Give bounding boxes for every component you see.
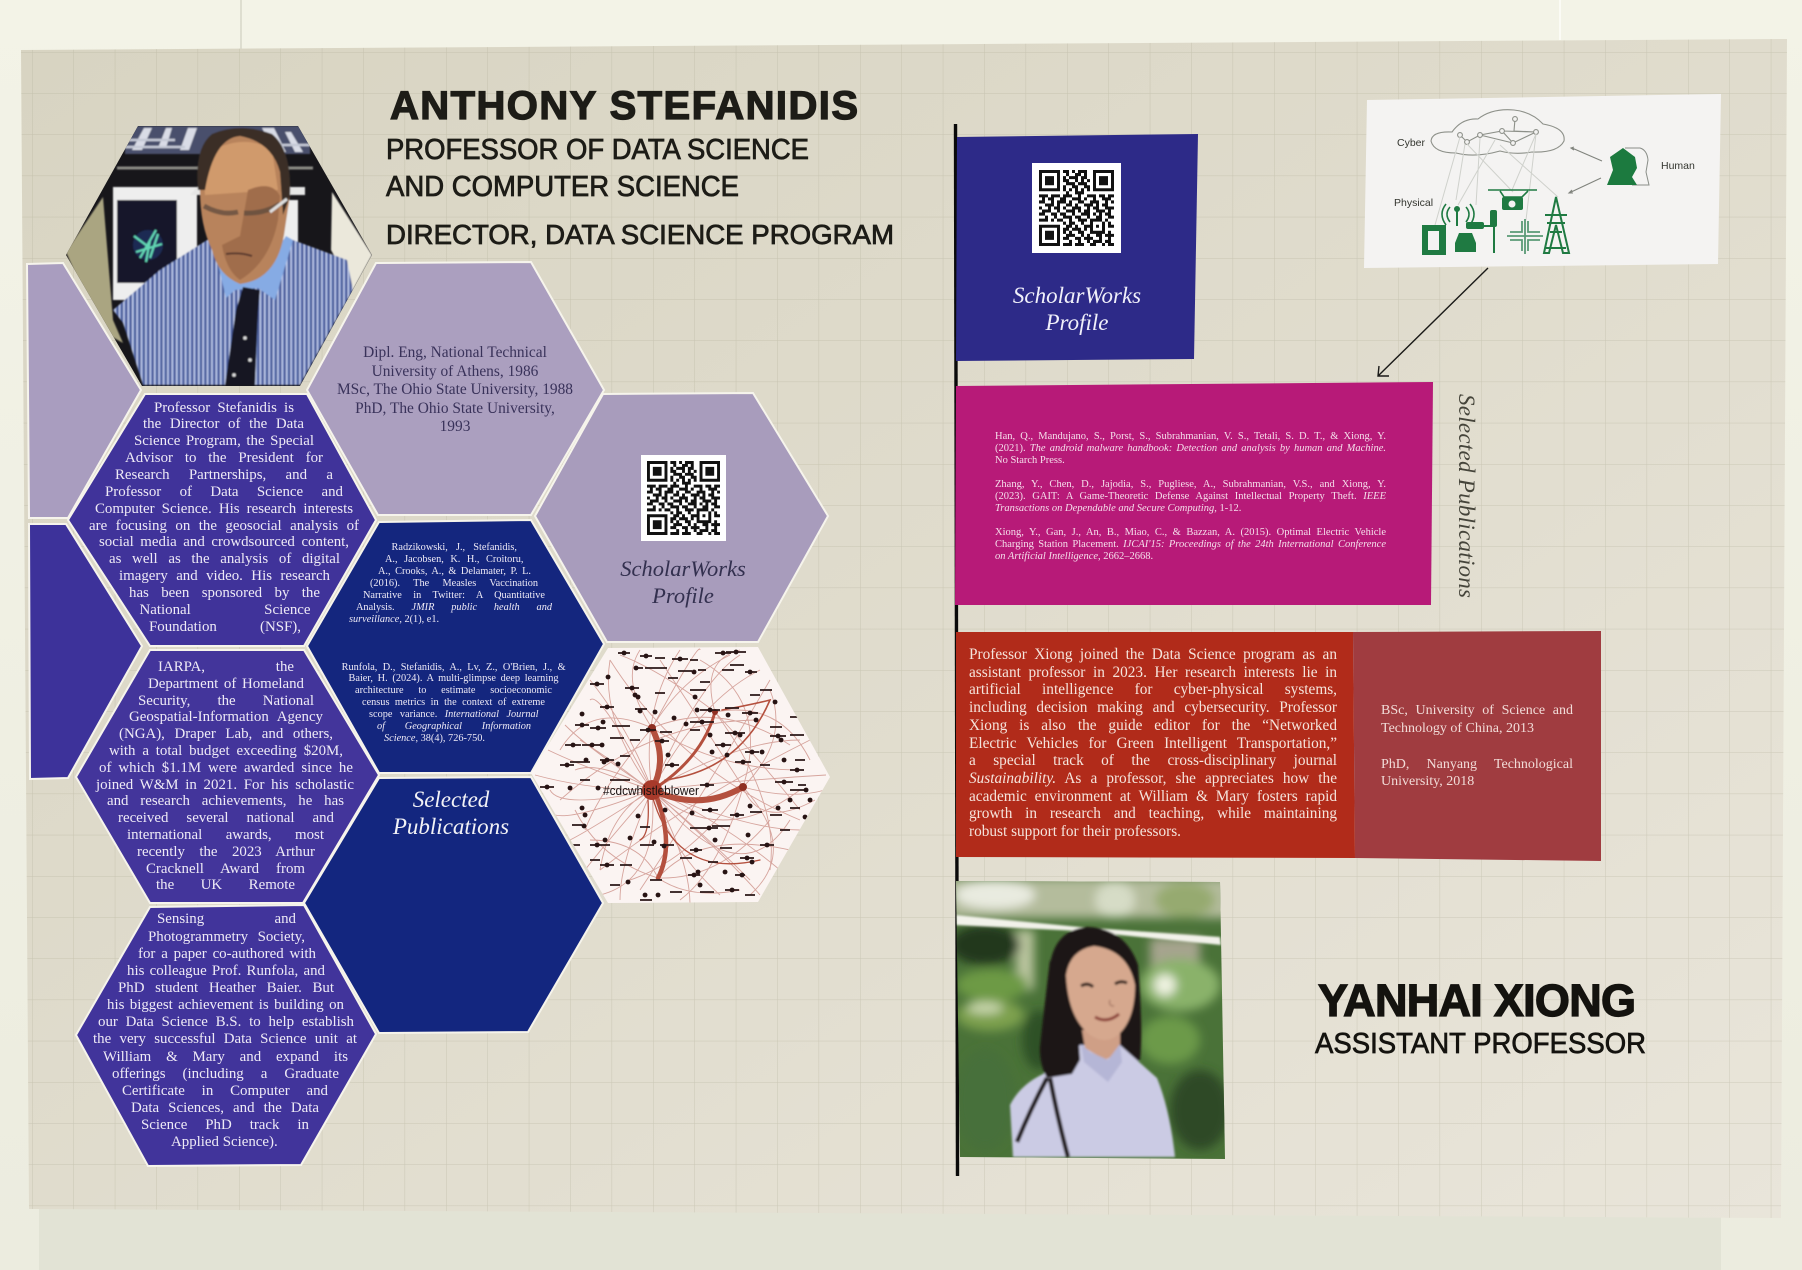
publication text: Runfola 2024: of Geographical Information — [377, 721, 531, 732]
publication text: Radzikowski 2016: Narrative in Twitter: A Quantitative — [363, 590, 545, 601]
publications text: Xiong: Han, Q., Mandujano, S., Porst, S., Subrahmanian, V. S., Tetali, S. D. T., & Xiong, Y. — [995, 431, 1386, 442]
bio text part 1: as well as the analysis of digital — [109, 551, 340, 567]
bio text part 2: joined W&M in 2021. For his scholastic — [96, 777, 354, 793]
bio text part 3: his biggest achievement is building on — [107, 997, 344, 1013]
publications text: Xiong: (2021). The android malware handbook: Detection and analysis by human and Machine. — [995, 443, 1386, 454]
biography red panel — [956, 632, 1355, 858]
partial blue hexagon at left edge — [29, 524, 142, 779]
biography text: Xiong: including decision making and cybersecurity. Professor — [969, 699, 1337, 716]
education rose panel — [1353, 631, 1601, 861]
caption: Selected Publications hexagon: Publications — [393, 814, 509, 839]
bio text part 2: with a total budget exceeding $20M, — [109, 743, 343, 759]
education text: Stefanidis: University of Athens, 1986 — [372, 363, 538, 380]
publications hexagon — [307, 520, 604, 773]
bio text part 3: Sensing and — [157, 911, 296, 927]
bio text part 2: Cracknell Award from — [146, 861, 305, 877]
heading: Yanhai Xiong name and title — [1315, 975, 1646, 1060]
biography text: Xiong: Professor Xiong joined the Data Science program as an — [969, 646, 1337, 663]
heading: Anthony Stefanidis name and titles: ANTHONY STEFANIDIS — [390, 84, 858, 128]
bio text part 1: the Director of the Data — [143, 416, 304, 432]
bio text part 3: Science PhD track in — [141, 1117, 309, 1133]
education text: Stefanidis: PhD, The Ohio State University, — [355, 400, 555, 417]
heading: Yanhai Xiong name and title: YANHAI XIONG — [1318, 975, 1636, 1026]
publication text: Radzikowski 2016 — [349, 542, 552, 625]
bio text part 3: Data Sciences, and the Data — [131, 1100, 319, 1116]
biography text: Xiong: Sustainability. As a professor, she appreciates how the — [969, 770, 1337, 787]
biography text: Xiong: robust support for their professors. — [969, 823, 1181, 840]
publication text: Radzikowski 2016: A., Jacobsen, K. H., Croitoru, — [385, 554, 524, 565]
education text: Stefanidis: MSc, The Ohio State University, 1988 — [337, 381, 573, 398]
publication text: Runfola 2024 — [342, 662, 566, 744]
caption: Selected Publications hexagon — [392, 787, 509, 839]
education text: Xiong: BSc, University of Science and — [1381, 703, 1573, 718]
biography text: Xiong — [969, 646, 1337, 840]
publication text: Radzikowski 2016: Radzikowski, J., Stefanidis, — [392, 542, 517, 553]
bio text part 3: PhD student Heather Baier. But — [118, 980, 334, 996]
biography text: Xiong: Xiong is also the guide editor for the “Networked — [969, 717, 1337, 734]
bio text part 1: National Science — [140, 602, 310, 618]
caption: ScholarWorks Profile in blue panel — [1013, 283, 1141, 335]
publication text: Runfola 2024: Science, 38(4), 726-750. — [384, 733, 485, 744]
ScholarWorks panel for Xiong — [956, 134, 1198, 361]
publication text: Radzikowski 2016: A., Crooks, A., & Delamater, P. L. — [378, 566, 531, 577]
photo: Yanhai Xiong portrait — [950, 875, 1230, 1165]
bio text part 2: and research achievements, he has — [107, 793, 344, 809]
caption: ScholarWorks Profile in hexagon: ScholarWorks — [620, 556, 746, 581]
bio text part 2: the UK Remote — [156, 877, 295, 893]
bio text part 1 — [89, 400, 359, 635]
bio text part 1: Professor Stefanidis is — [154, 400, 294, 416]
publications text: Xiong: Xiong, Y., Gan, J., An, B., Miao, C., & Bazzan, A. (2015). Optimal Electric Vehicle — [995, 527, 1386, 538]
bio text part 2: of which $1.1M were awarded since he — [99, 760, 353, 776]
publication text: Runfola 2024: Baier, H. (2024). A multi-glimpse deep learning — [348, 673, 558, 684]
caption: ScholarWorks Profile in blue panel: Profile — [1045, 310, 1109, 335]
bio text part 1: Research Partnerships, and a — [115, 467, 333, 483]
bio hexagon 3 — [76, 905, 376, 1166]
education text: Xiong: PhD, Nanyang Technological — [1381, 757, 1573, 772]
ScholarWorks QR hexagon — [535, 393, 828, 642]
cloud network icon — [1431, 110, 1564, 155]
bio text part 2: recently the 2023 Arthur — [137, 844, 315, 860]
biography text: Xiong: growth in research and teaching, while maintaining — [969, 805, 1337, 822]
bio text part 3: for a paper co-authored with — [138, 946, 316, 962]
education text: Stefanidis — [337, 344, 573, 435]
education text: Xiong: Technology of China, 2013 — [1381, 721, 1534, 736]
caption: Selected Publications hexagon: Selected — [413, 787, 489, 812]
caption: ScholarWorks Profile in hexagon: Profile — [652, 583, 714, 608]
publication text: Runfola 2024: architecture to estimate socioeconomic — [355, 685, 552, 696]
education text: Stefanidis: Dipl. Eng, National Technical — [363, 344, 547, 361]
bio hexagon 2 — [76, 650, 379, 903]
publications text: Xiong: (2023). GAIT: A Game-Theoretic Defense Against Intellectual Property Theft. IEEE — [995, 491, 1386, 502]
bio text part 1: imagery and video. His research — [119, 568, 330, 584]
bio text part 1: Professor of Data Science and — [105, 484, 343, 500]
bio text part 3: his colleague Prof. Runfola, and — [127, 963, 325, 979]
vertical divider line — [956, 124, 958, 1176]
publication text: Runfola 2024: Runfola, D., Stefanidis, A., Lv, Z., O'Brien, J., & — [342, 662, 566, 672]
biography text: Xiong: academic environment at William & Mary fosters rapid — [969, 788, 1337, 805]
cyber to physical connectors — [1435, 134, 1558, 225]
diagram labels: Physical — [1394, 197, 1433, 209]
caption: ScholarWorks Profile in hexagon — [620, 556, 746, 608]
bio text part 3: Photogrammetry Society, — [148, 929, 305, 945]
bio text part 2: IARPA, the — [158, 659, 294, 675]
education text: Stefanidis: 1993 — [440, 418, 470, 435]
bio text part 2: Security, the National — [138, 693, 314, 709]
rotated heading: selected publications: Selected Publications — [1454, 394, 1479, 598]
publication text: Radzikowski 2016: (2016). The Measles Vaccination — [370, 578, 538, 589]
diagram labels: Human — [1661, 160, 1695, 172]
heading: Yanhai Xiong name and title: ASSISTANT PROFESSOR — [1315, 1028, 1646, 1060]
bio text part 3: the very successful Data Science unit at — [93, 1031, 357, 1047]
bio hexagon 1 — [68, 394, 376, 646]
bio text part 2: (NGA), Draper Lab, and others, — [119, 726, 333, 742]
bio text part 3: William & Mary and expand its — [103, 1049, 348, 1065]
education text: Xiong: University, 2018 — [1381, 774, 1474, 789]
publications text: Xiong: on Artificial Intelligence, 2662–2668. — [995, 551, 1153, 562]
caption: ScholarWorks Profile in blue panel: ScholarWorks — [1013, 283, 1141, 308]
biography text: Xiong: artificial intelligence for cyber-physical systems, — [969, 681, 1337, 698]
publications text: Xiong: Transactions on Dependable and Secure Computing, 1-12. — [995, 503, 1241, 514]
diagram: cyber physical human systems — [1364, 94, 1721, 268]
biography text: Xiong: a special track of the cross-disciplinary journal — [969, 752, 1337, 769]
bio text part 1: Computer Science. His research interests — [95, 501, 353, 517]
bio text part 1: are focusing on the geosocial analysis of — [89, 518, 359, 534]
publication text: Radzikowski 2016: surveillance, 2(1), e1. — [349, 614, 439, 625]
selected publications magenta panel — [955, 382, 1433, 605]
publication text: Runfola 2024: scope variance. International Journal — [369, 709, 538, 720]
heading: Anthony Stefanidis name and titles: PROFESSOR OF DATA SCIENCE — [386, 134, 809, 166]
bio text part 3: offerings (including a Graduate — [112, 1066, 339, 1082]
bio text part 2: Department of Homeland — [148, 676, 304, 692]
publications text: Xiong: Zhang, Y., Chen, D., Jajodia, S., Pugliese, A., Subrahmanian, V.S., and Xiong, Y. — [995, 479, 1386, 490]
bio text part 2: Geospatial-Information Agency — [129, 709, 323, 725]
bio text part 1: Foundation (NSF), — [149, 619, 301, 635]
bio text part 1: Science Program, the Special — [134, 433, 314, 449]
education text: Xiong — [1381, 703, 1573, 789]
biography text: Xiong: assistant professor in 2023. Her research interests lie in — [969, 664, 1337, 681]
icon: physical infrastructure — [1422, 190, 1569, 255]
arrows between human and cyber physical — [1569, 147, 1602, 193]
bio text part 3: Certificate in Computer and — [122, 1083, 328, 1099]
publications text: Xiong: Charging Station Placement. IJCAI'15: Proceedings of the 24th International Conference — [995, 539, 1386, 550]
network graph hexagon: #cdcwhistleblower — [603, 783, 700, 798]
heading: Anthony Stefanidis name and titles: DIRECTOR, DATA SCIENCE PROGRAM — [386, 219, 894, 250]
photo hexagon: Anthony Stefanidis portrait — [60, 120, 380, 390]
diagram labels — [1394, 137, 1695, 209]
decorative partial lavender hexagon at left edge — [27, 263, 141, 518]
network graph hexagon — [525, 640, 835, 910]
heading: Anthony Stefanidis name and titles: AND COMPUTER SCIENCE — [386, 171, 739, 203]
arrow from diagram to publications — [1378, 268, 1488, 376]
bio text part 3 — [93, 911, 357, 1150]
education hexagon — [307, 262, 604, 515]
publications text: Xiong: No Starch Press. — [995, 455, 1065, 466]
heading: Anthony Stefanidis name and titles — [386, 84, 894, 250]
bio text part 2: received several national and — [118, 810, 334, 826]
bio text part 2 — [96, 659, 354, 893]
bio text part 2: international awards, most — [127, 827, 324, 843]
bio text part 3: our Data Science B.S. to help establish — [98, 1014, 354, 1030]
publications text: Xiong — [995, 431, 1386, 562]
bio text part 3: Applied Science). — [171, 1134, 278, 1150]
icon: human head — [1607, 148, 1649, 185]
bio text part 1: has been sponsored by the — [129, 585, 320, 601]
selected publications label hexagon — [304, 777, 603, 1033]
publication text: Runfola 2024: census metrics in the context of extreme — [362, 697, 545, 708]
publication text: Radzikowski 2016: Analysis. JMIR public health and — [356, 602, 552, 613]
bio text part 1: social media and crowdsourced content, — [99, 534, 349, 550]
diagram labels: Cyber — [1397, 137, 1426, 149]
bio text part 1: Advisor to the President for — [125, 450, 323, 466]
biography text: Xiong: Electric Vehicles for Green Intelligent Transportation,” — [969, 735, 1337, 752]
